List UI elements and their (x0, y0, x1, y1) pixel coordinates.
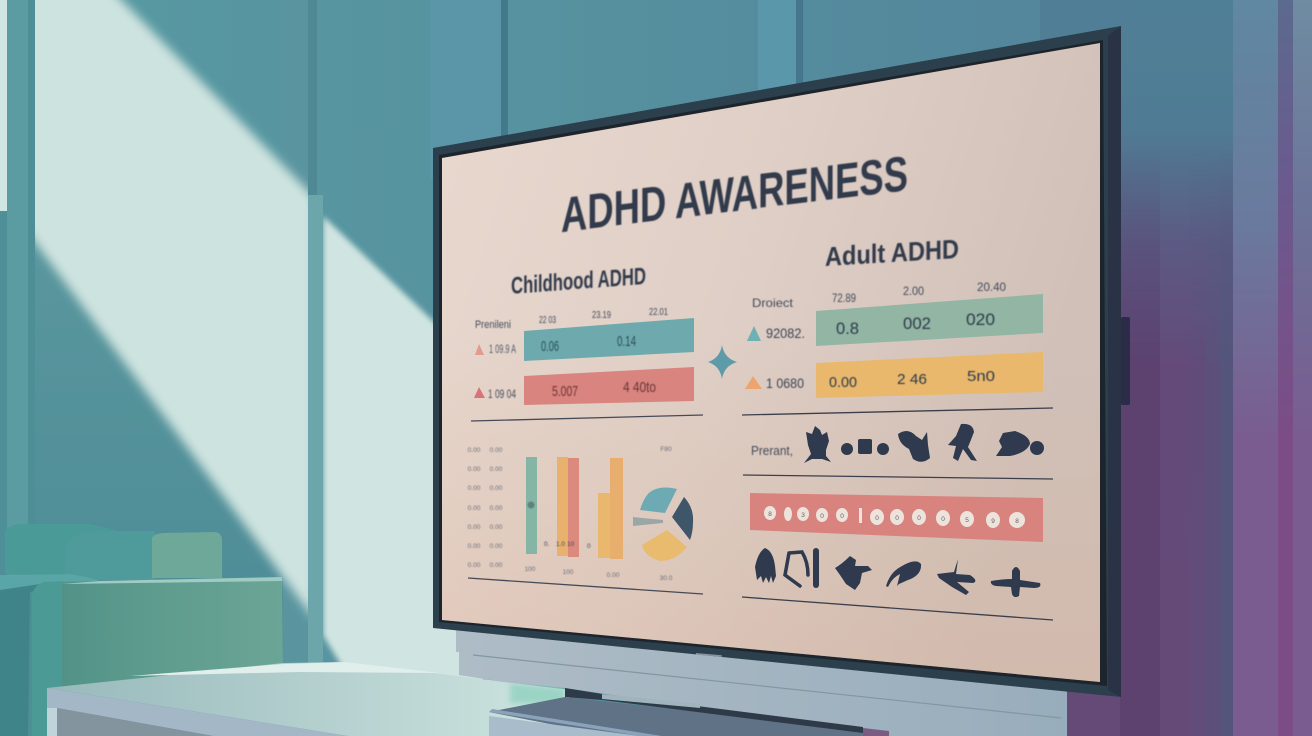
row markers: 1 09.9 A (489, 344, 516, 356)
chart axis labels: 0.00 (468, 485, 481, 492)
red number band: 0 (820, 513, 824, 520)
chart axis labels: 100 (563, 569, 574, 576)
row markers (474, 344, 516, 401)
red number band: 5 (965, 517, 969, 524)
chart axis labels: 0.00 (607, 572, 620, 579)
bar values: 020 (966, 310, 995, 329)
red number band: 8 (1015, 518, 1019, 525)
title: ADHD AWARENESS (561, 146, 908, 243)
chart axis labels: 0.00 (468, 524, 481, 531)
red number band: 0 (895, 515, 899, 522)
bar chart: 1.0 (556, 541, 565, 548)
bar chart: 0 (587, 543, 591, 550)
chart axis labels: 0.00 (490, 524, 503, 531)
table column labels: Droiect (752, 296, 794, 310)
green data bar (816, 294, 1043, 346)
TV side button (1121, 317, 1130, 405)
divider (468, 578, 703, 594)
red number band: 0 (840, 513, 844, 520)
bar values: 0.8 (836, 319, 859, 338)
row markers: 1 09 04 (488, 387, 516, 401)
row markers: 1 0680 (766, 375, 804, 391)
row markers: 92082. (766, 326, 805, 341)
chart axis labels: F80 (660, 446, 672, 453)
red number band: 0 (941, 516, 945, 523)
chart axis labels: 0.00 (490, 505, 503, 512)
bar chart: 10 (567, 541, 575, 548)
table column labels: Prenileni (475, 319, 511, 331)
table column labels: 23.19 (592, 309, 611, 321)
red number band: 8 (768, 511, 772, 518)
chart axis labels: 0.00 (468, 562, 481, 569)
chart axis labels: 0.00 (490, 466, 503, 473)
chart axis labels: 0.00 (490, 543, 503, 550)
table column labels: 72.89 (832, 291, 856, 305)
orange data bar (816, 352, 1043, 398)
divider (471, 415, 703, 421)
TV brand mark (696, 653, 722, 657)
chart axis labels: 0.00 (468, 505, 481, 512)
red number band: 0 (917, 515, 921, 522)
bar values: 002 (903, 314, 931, 333)
bar values (541, 333, 656, 400)
red number band (750, 493, 1043, 542)
pie chart (633, 488, 693, 561)
heading: childhood ADHD: Childhood ADHD (511, 263, 646, 300)
table column labels: 2.00 (903, 284, 924, 298)
row markers (745, 326, 805, 391)
heading: adult ADHD: Adult ADHD (825, 234, 959, 272)
table column labels: 22.01 (649, 306, 668, 318)
icon row: symptoms (804, 424, 1044, 463)
TV screen (442, 43, 1100, 682)
divider (742, 597, 1053, 620)
sunlight beam on wall (20, 0, 500, 690)
chart axis labels: 0.00 (468, 466, 481, 473)
bar values (829, 310, 995, 391)
chart axis labels (468, 446, 673, 582)
chart axis labels: 30.0 (660, 575, 673, 582)
chart axis labels: 0.00 (468, 447, 481, 454)
red number band: 9 (991, 518, 995, 525)
chart axis labels: 0.00 (490, 447, 503, 454)
divider (742, 408, 1053, 415)
panel: adult ADHD (742, 234, 1053, 620)
chart axis labels: 0.00 (468, 543, 481, 550)
icon: centre sparkle (708, 345, 737, 379)
TV stand (456, 628, 1067, 736)
TV frame (433, 26, 1121, 697)
bar values: 5.007 (552, 383, 578, 400)
white table (47, 662, 570, 736)
bar values: 0.00 (829, 374, 857, 391)
bar values: 5n0 (967, 368, 995, 385)
chart axis labels: 0.00 (490, 485, 503, 492)
bar values: 2 46 (897, 371, 927, 388)
table column labels (752, 280, 1006, 310)
red data bar (524, 367, 694, 405)
bar values: 0.06 (541, 338, 559, 355)
divider (743, 475, 1053, 479)
table column labels (475, 306, 668, 331)
panel: childhood ADHD (468, 263, 703, 594)
red number band: 0 (875, 515, 879, 522)
bar values: 4 40to (623, 379, 656, 396)
teal data bar (524, 318, 694, 361)
red number band: 3 (801, 512, 805, 519)
table column labels: 22 03 (539, 314, 556, 326)
bar chart (526, 457, 623, 559)
bar chart: 0. (544, 541, 550, 548)
chart axis labels: 100 (525, 566, 536, 573)
sofa (0, 524, 283, 736)
symptom label: Prerant, (751, 444, 793, 458)
icon row: symbols (755, 548, 1040, 597)
bar values: 0.14 (617, 333, 636, 350)
chart axis labels: 0.00 (490, 562, 503, 569)
table column labels: 20.40 (977, 280, 1006, 294)
